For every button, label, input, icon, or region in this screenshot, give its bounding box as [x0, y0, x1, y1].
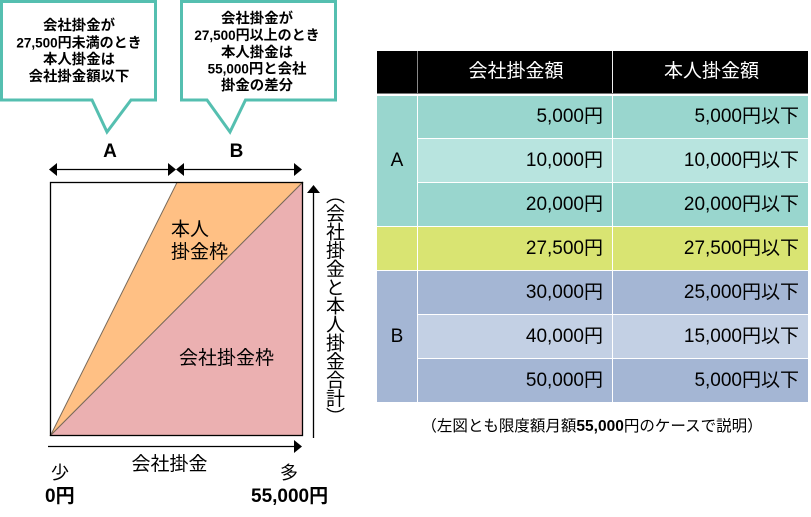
- arrow: y axis: [307, 185, 320, 438]
- arrow: range A: [49, 163, 176, 176]
- group A: A: [391, 150, 403, 171]
- callout: B: 55,000円と会社: [208, 60, 307, 78]
- row 50,000: [418, 359, 612, 402]
- group A: [377, 96, 417, 226]
- label: A: A: [103, 141, 117, 162]
- row 10,000: 10,000円: [526, 150, 603, 170]
- callout: B: 27,500円以上のとき: [194, 27, 320, 43]
- group B: [377, 271, 417, 402]
- callout: B: 掛金の差分: [221, 76, 294, 94]
- area: company contribution: [50, 182, 302, 436]
- callout: A: 会社掛金が: [43, 16, 116, 34]
- table: 5,000円以下: [694, 106, 799, 127]
- row 5,000: [418, 96, 612, 138]
- callout: B: [182, 2, 336, 132]
- arrow: x axis: [48, 440, 302, 453]
- row 27,500: [377, 227, 417, 270]
- row 30,000: 30,000円: [526, 282, 603, 302]
- table: 25,000円以下: [684, 282, 799, 302]
- axis label: total: （会社掛金と本人掛金合計）: [323, 185, 344, 426]
- arrow: range B: [176, 163, 302, 176]
- label: high: 多: [280, 463, 298, 483]
- table: 27,500円以下: [684, 238, 799, 258]
- callout: A: 本人掛金は: [43, 50, 115, 68]
- table: 5,000円以下: [694, 370, 799, 390]
- group B: B: [391, 326, 403, 346]
- axis label: company contribution: 会社掛金: [131, 453, 208, 475]
- callout: A: 27,500円未満のとき: [16, 34, 142, 50]
- callout: B: 本人掛金は: [221, 43, 293, 61]
- frame: [50, 182, 302, 436]
- note: （左図とも限度額月額55,000円のケースで説明）: [421, 417, 763, 435]
- row 40,000: 40,000円: [526, 326, 603, 346]
- label: 55,000 yen: 55,000円: [251, 486, 328, 507]
- row 50,000: 50,000円: [526, 370, 603, 390]
- header: 本人掛金額: [664, 61, 759, 82]
- label: B: B: [230, 141, 243, 162]
- label: low: 少: [51, 463, 69, 483]
- label: 0 yen: 0円: [45, 486, 75, 507]
- table: 27,500円: [526, 238, 603, 258]
- row 30,000: [418, 271, 612, 314]
- table: 15,000円以下: [684, 326, 799, 346]
- header: 会社掛金額: [468, 61, 564, 82]
- row 5,000: 5,000円: [536, 106, 603, 127]
- chart: contribution square: [50, 182, 302, 436]
- row 20,000: 20,000円: [526, 194, 603, 214]
- label: company area: 会社掛金枠: [179, 347, 274, 369]
- table: 20,000円以下: [684, 194, 799, 214]
- row 10,000: [418, 139, 612, 182]
- label: employee area: 本人: [171, 218, 209, 240]
- callout: B: 会社掛金が: [221, 9, 294, 27]
- callout: A: [2, 2, 156, 132]
- row 40,000: [418, 315, 612, 358]
- table: 10,000円以下: [684, 150, 799, 170]
- callout: A: 会社掛金額以下: [29, 67, 129, 85]
- label: employee area: 掛金枠: [171, 241, 228, 263]
- area: employee contribution: [50, 182, 302, 436]
- header: [377, 51, 808, 94]
- row 20,000: [418, 183, 612, 226]
